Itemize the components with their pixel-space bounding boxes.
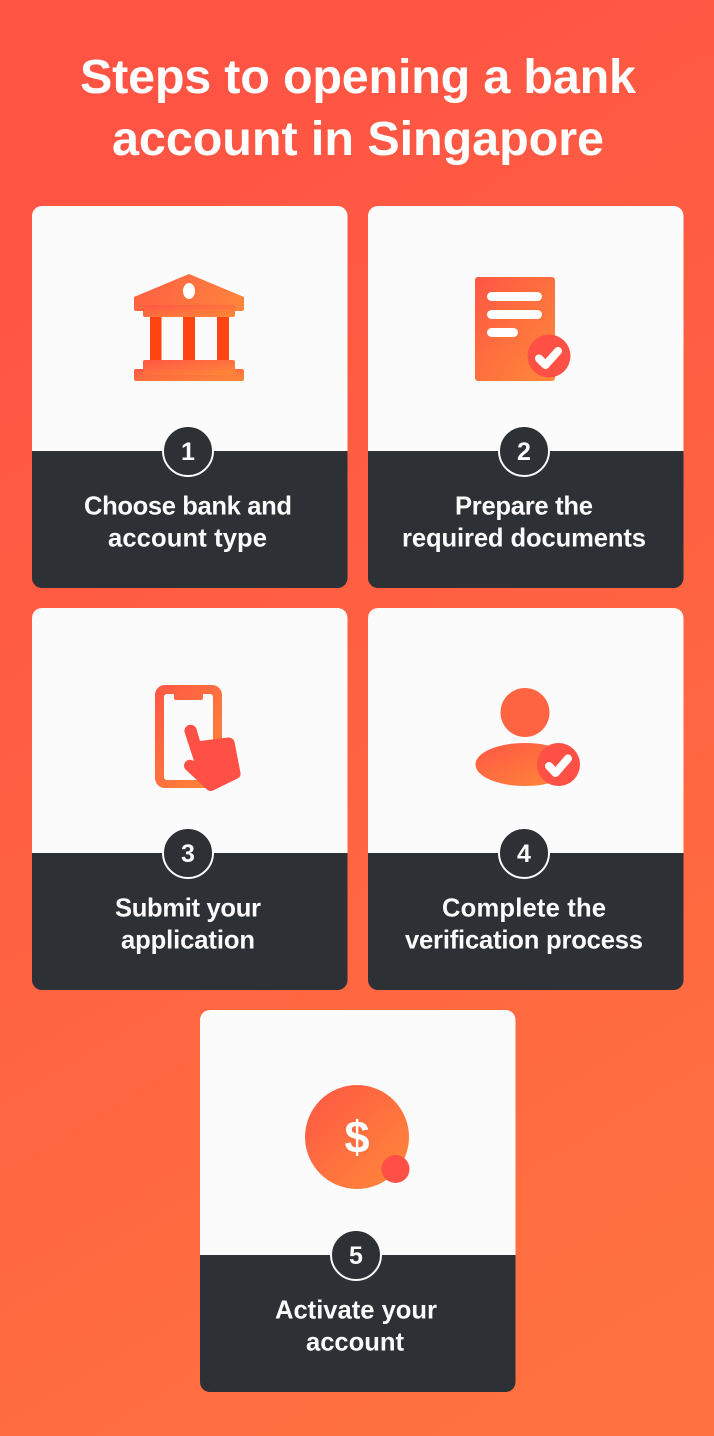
icon: bank building <box>134 274 244 381</box>
step number 4: 4 <box>517 840 531 868</box>
step 3 label <box>115 894 261 954</box>
step number 2: 2 <box>517 438 531 466</box>
step 3 label: Submit your <box>115 894 261 922</box>
step 2 label: Prepare the <box>455 492 593 520</box>
step 1 label: Choose bank and <box>84 492 292 520</box>
step number 1: 1 <box>181 438 195 466</box>
title <box>80 50 637 166</box>
step 5 label: account <box>306 1328 404 1356</box>
icon: phone with pointing hand <box>155 685 241 791</box>
step 4 label: verification process <box>405 926 643 954</box>
step number 3 <box>163 828 213 878</box>
panel: step 1 choose bank <box>32 206 348 588</box>
step 5 label: Activate your <box>275 1296 437 1324</box>
step number 5 <box>331 1230 381 1280</box>
step 2 label <box>402 492 646 552</box>
panel: step 3 submit application <box>32 608 348 990</box>
step 4 label: Complete the <box>442 894 606 922</box>
icon: document with check <box>475 277 570 381</box>
panel: step 5 activate account <box>200 1010 516 1392</box>
step 1 label <box>84 492 292 552</box>
step number 1 <box>163 426 213 476</box>
icon: dollar coin: $ <box>344 1112 370 1162</box>
step number 5: 5 <box>349 1242 363 1270</box>
step 4 label <box>405 894 643 954</box>
step 2 label: required documents <box>402 524 646 552</box>
step 1 label: account type <box>108 524 267 552</box>
step number 3: 3 <box>181 840 195 868</box>
title: Steps to opening a bank <box>80 50 637 104</box>
icon: person with check <box>476 688 580 786</box>
step number 2 <box>499 426 549 476</box>
icon: dollar coin <box>305 1085 410 1189</box>
step number 4 <box>499 828 549 878</box>
title: account in Singapore <box>112 112 604 166</box>
panel: step 2 prepare documents <box>368 206 684 588</box>
step 3 label: application <box>121 926 255 954</box>
step 5 label <box>275 1296 437 1356</box>
panel: step 4 verification <box>368 608 684 990</box>
